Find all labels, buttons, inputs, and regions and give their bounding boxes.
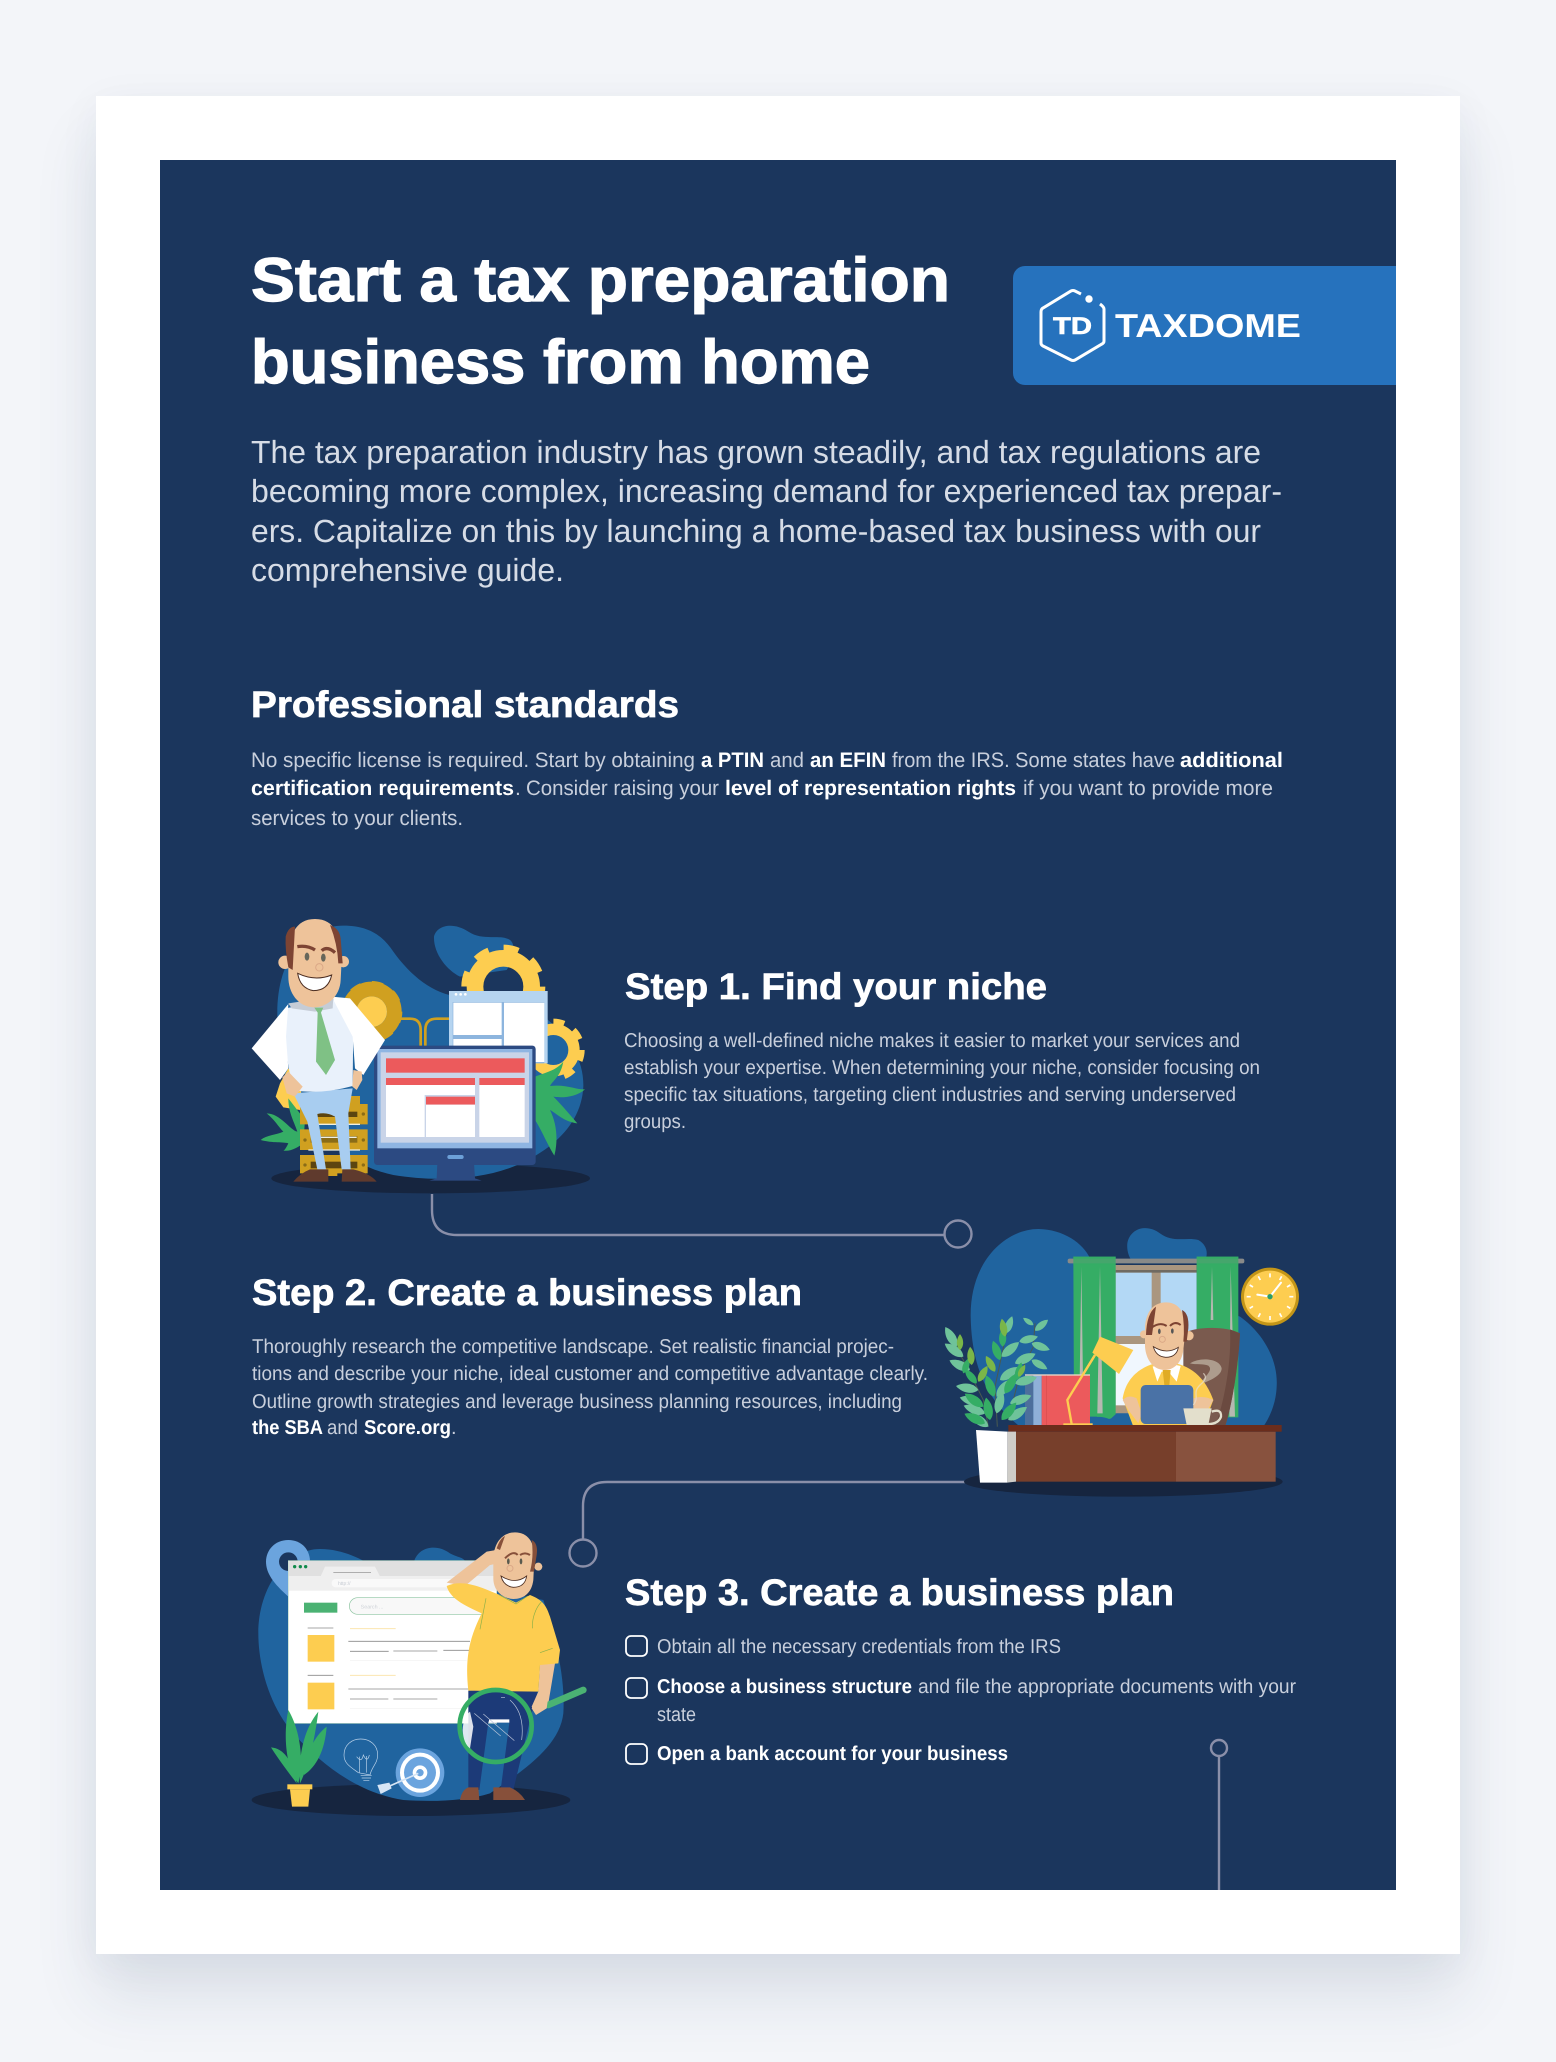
pipes bbox=[400, 1019, 450, 1047]
man in white shirt bbox=[252, 919, 385, 1182]
pot plant bbox=[271, 1710, 327, 1807]
office chair bbox=[1183, 1328, 1240, 1427]
step 3 checklist: Choose a business structure bbox=[657, 1676, 912, 1698]
browser window bbox=[288, 1561, 497, 1723]
step 2 body bbox=[252, 1336, 928, 1439]
step 1 body: establish your expertise. When determining your niche, consider focusing on bbox=[624, 1057, 1260, 1079]
ground shadow bbox=[964, 1467, 1283, 1497]
step 1 body bbox=[624, 1030, 1260, 1133]
professional standards body: services to your clients. bbox=[251, 807, 463, 830]
checkbox 3 bbox=[626, 1744, 647, 1764]
wall clock bbox=[1241, 1268, 1299, 1326]
step 3 checklist: and file the appropriate documents with your bbox=[918, 1676, 1296, 1698]
intro paragraph: becoming more complex, increasing demand for experienced tax prepar- bbox=[251, 473, 1282, 509]
man with magnifying glass bbox=[447, 1532, 583, 1800]
checkbox 1 bbox=[626, 1636, 647, 1656]
logo: TaxDome: TAXDOME bbox=[1115, 307, 1301, 344]
illustration: man with computer and gears bbox=[252, 919, 590, 1193]
step 3 heading: Step 3. Create a business plan bbox=[625, 1572, 1174, 1613]
white page card bbox=[96, 96, 1460, 1954]
step 1 body: groups. bbox=[624, 1111, 686, 1133]
step 2 body: . bbox=[451, 1417, 457, 1439]
potted plant bbox=[941, 1315, 1051, 1483]
checkbox 2 bbox=[626, 1678, 647, 1698]
step 2 body: Thoroughly research the competitive landscape. Set realistic financial projec- bbox=[252, 1336, 894, 1358]
professional standards body: additional bbox=[1180, 749, 1283, 772]
professional standards body: an EFIN bbox=[810, 749, 886, 772]
back window bbox=[449, 991, 548, 1063]
step 2 body: and bbox=[327, 1417, 358, 1439]
professional standards body: level of representation rights bbox=[725, 777, 1016, 800]
professional standards body: and bbox=[770, 749, 804, 772]
illustration: man at desk by window bbox=[941, 1228, 1299, 1497]
step 1 heading: Step 1. Find your niche bbox=[625, 966, 1047, 1007]
step 3 checklist: Open a bank account for your business bbox=[657, 1743, 1008, 1765]
light bulb outline bbox=[344, 1739, 378, 1781]
monitor bbox=[374, 1046, 536, 1181]
curtains and rod bbox=[1068, 1257, 1244, 1425]
blue blob backgrounds bbox=[258, 1548, 564, 1801]
professional standards body: Consider raising your bbox=[526, 777, 719, 800]
step 2 body: Score.org bbox=[364, 1417, 451, 1439]
connector: continuing below step 3 bbox=[1211, 1740, 1227, 1890]
browser window: Search ... bbox=[361, 1604, 383, 1610]
map pin bbox=[266, 1540, 310, 1597]
title: Start a tax preparation bbox=[251, 246, 950, 315]
plants bbox=[261, 1062, 585, 1156]
logo: TaxDome: TD bbox=[1053, 313, 1092, 340]
desk lamp bbox=[1066, 1337, 1133, 1424]
desk bbox=[1008, 1425, 1282, 1482]
connector: step 2 to step 3 bbox=[570, 1482, 966, 1566]
professional standards body: a PTIN bbox=[701, 749, 764, 772]
step 2 heading: Step 2. Create a business plan bbox=[252, 1272, 802, 1313]
yellow gears bbox=[344, 948, 582, 1078]
step 3 checklist: Obtain all the necessary credentials from the IRS bbox=[657, 1636, 1061, 1658]
professional standards body: certification requirements bbox=[251, 777, 514, 800]
blue blob backgrounds bbox=[971, 1228, 1277, 1427]
connector: step 1 to step 2 bbox=[432, 1194, 972, 1248]
professional standards body: . bbox=[515, 777, 521, 800]
intro paragraph: ers. Capitalize on this by launching a home-based tax business with our bbox=[251, 513, 1261, 549]
intro paragraph bbox=[251, 434, 1282, 588]
window bbox=[1115, 1265, 1197, 1413]
server stack bbox=[300, 1096, 368, 1176]
target with arrow bbox=[377, 1748, 444, 1797]
professional standards body: No specific license is required. Start by obtaining bbox=[251, 749, 695, 772]
browser window: http:// bbox=[338, 1581, 351, 1586]
step 3 checklist bbox=[626, 1636, 1296, 1765]
books bbox=[1025, 1355, 1095, 1425]
step 3 checklist: state bbox=[657, 1704, 696, 1726]
heading: professional standards: Professional standards bbox=[251, 684, 679, 725]
logo: TaxDome bbox=[1013, 266, 1396, 385]
intro paragraph: comprehensive guide. bbox=[251, 552, 564, 588]
man in yellow shirt bbox=[1123, 1302, 1213, 1427]
step 1 body: Choosing a well-defined niche makes it easier to market your services and bbox=[624, 1030, 1240, 1052]
step 2 body: the SBA bbox=[252, 1417, 323, 1439]
ground shadow bbox=[271, 1163, 590, 1193]
intro paragraph: The tax preparation industry has grown steadily, and tax regulations are bbox=[251, 434, 1261, 470]
blue blob backgrounds bbox=[277, 926, 583, 1179]
step 1 body: specific tax situations, targeting client industries and serving underserved bbox=[624, 1084, 1236, 1106]
navy panel background bbox=[160, 160, 1396, 1890]
title: business from home bbox=[251, 328, 870, 397]
professional standards body: if you want to provide more bbox=[1023, 777, 1273, 800]
professional standards body: from the IRS. Some states have bbox=[892, 749, 1175, 772]
ground shadow bbox=[252, 1784, 570, 1816]
professional standards body bbox=[251, 749, 1283, 830]
coffee cup bbox=[1183, 1373, 1221, 1425]
step 2 body: Outline growth strategies and leverage business planning resources, including bbox=[252, 1391, 902, 1413]
step 2 body: tions and describe your niche, ideal customer and competitive advantage clearly. bbox=[252, 1363, 928, 1385]
title bbox=[251, 246, 950, 397]
illustration: man with magnifier and browser bbox=[252, 1532, 583, 1816]
